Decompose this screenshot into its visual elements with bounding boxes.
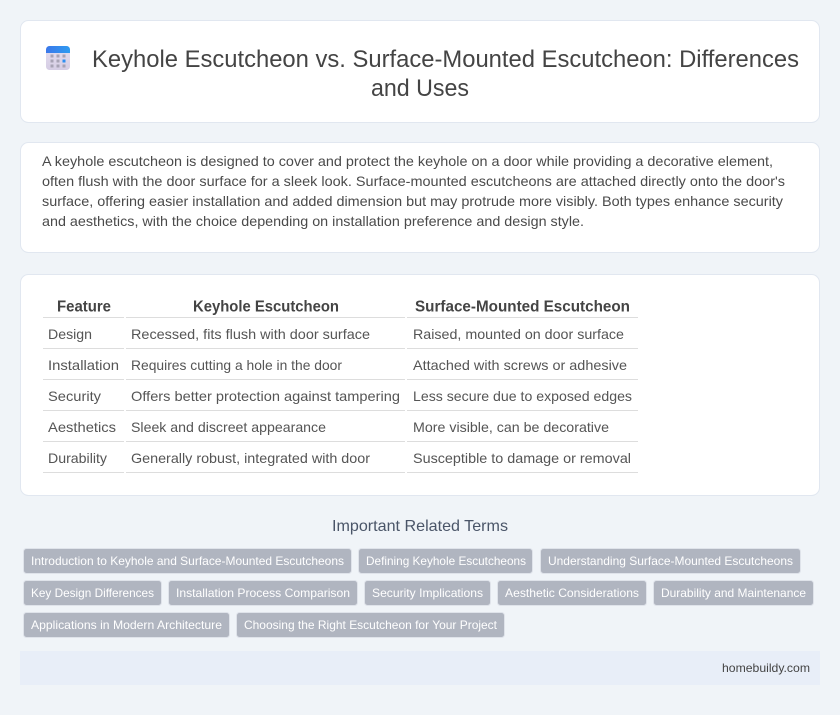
tag: Choosing the Right Escutcheon for Your Project bbox=[244, 618, 498, 632]
row: aesthetics bbox=[48, 419, 609, 435]
text block: description paragraph: surface, offering easier installation and added dimension but may protrude more visibly. Both types enhance security bbox=[42, 193, 783, 209]
tag bbox=[24, 548, 352, 574]
heading: important related terms: Important Related Terms bbox=[332, 518, 508, 535]
tag bbox=[498, 580, 646, 606]
tag bbox=[654, 580, 814, 606]
panel: comparison table bbox=[20, 274, 820, 496]
row: security bbox=[48, 388, 632, 404]
row: durability: Susceptible to damage or removal bbox=[413, 450, 631, 466]
tag: Key Design Differences bbox=[31, 586, 154, 600]
tag bbox=[540, 548, 800, 574]
row: design: Raised, mounted on door surface bbox=[413, 326, 624, 342]
tag: Introduction to Keyhole and Surface-Mounted Escutcheons bbox=[31, 554, 344, 568]
tag bbox=[168, 580, 358, 606]
row: installation: Installation bbox=[48, 357, 119, 373]
row: installation: Requires cutting a hole in the door bbox=[131, 357, 342, 373]
related terms tags bbox=[24, 548, 814, 638]
tag: Aesthetic Considerations bbox=[505, 586, 639, 600]
tag bbox=[24, 612, 230, 638]
tag: Applications in Modern Architecture bbox=[31, 618, 222, 632]
row: design: Design bbox=[48, 326, 92, 342]
tag: Understanding Surface-Mounted Escutcheons bbox=[548, 554, 793, 568]
row: design bbox=[48, 326, 624, 342]
tag bbox=[364, 580, 490, 606]
table header: Keyhole Escutcheon bbox=[193, 298, 339, 316]
row: durability bbox=[48, 450, 631, 466]
table header: Feature bbox=[57, 298, 111, 316]
tag bbox=[24, 580, 162, 606]
row: design: Recessed, fits flush with door surface bbox=[131, 326, 370, 342]
title card bbox=[20, 20, 820, 122]
title: and Uses bbox=[371, 75, 469, 102]
row: installation: Attached with screws or adhesive bbox=[413, 357, 627, 373]
text block: description paragraph: and aesthetics, with the choice depending on installation preference and design style. bbox=[42, 213, 584, 229]
text block: description paragraph: often flush with the door surface for a sleek look. Surface-mounted escutcheons are attached directly onto the door's bbox=[42, 173, 785, 189]
footer bbox=[20, 651, 820, 685]
text block: description paragraph bbox=[42, 153, 785, 229]
footer: homebuildy.com bbox=[722, 661, 810, 675]
tag: Durability and Maintenance bbox=[661, 586, 806, 600]
row: security: Security bbox=[48, 388, 101, 404]
icon: calendar bbox=[46, 46, 70, 70]
title: Keyhole Escutcheon vs. Surface-Mounted Escutcheon: Differences bbox=[92, 46, 799, 73]
title bbox=[92, 46, 799, 102]
panel: description bbox=[20, 142, 820, 252]
table header: Surface-Mounted Escutcheon bbox=[415, 298, 630, 316]
row: aesthetics: Sleek and discreet appearance bbox=[131, 419, 326, 435]
tag bbox=[236, 612, 504, 638]
table header bbox=[57, 298, 630, 316]
row: installation bbox=[48, 357, 627, 373]
row: aesthetics: Aesthetics bbox=[48, 419, 116, 435]
row: aesthetics: More visible, can be decorative bbox=[413, 419, 609, 435]
tag bbox=[358, 548, 532, 574]
tag: Defining Keyhole Escutcheons bbox=[366, 554, 526, 568]
row: durability: Durability bbox=[48, 450, 107, 466]
text block: description paragraph: A keyhole escutcheon is designed to cover and protect the keyhole on a door while providing a decorative element, bbox=[42, 153, 773, 169]
row: security: Offers better protection against tampering bbox=[131, 388, 400, 404]
tag: Security Implications bbox=[372, 586, 483, 600]
tag: Installation Process Comparison bbox=[176, 586, 350, 600]
row: security: Less secure due to exposed edges bbox=[413, 388, 632, 404]
row: durability: Generally robust, integrated with door bbox=[131, 450, 370, 466]
